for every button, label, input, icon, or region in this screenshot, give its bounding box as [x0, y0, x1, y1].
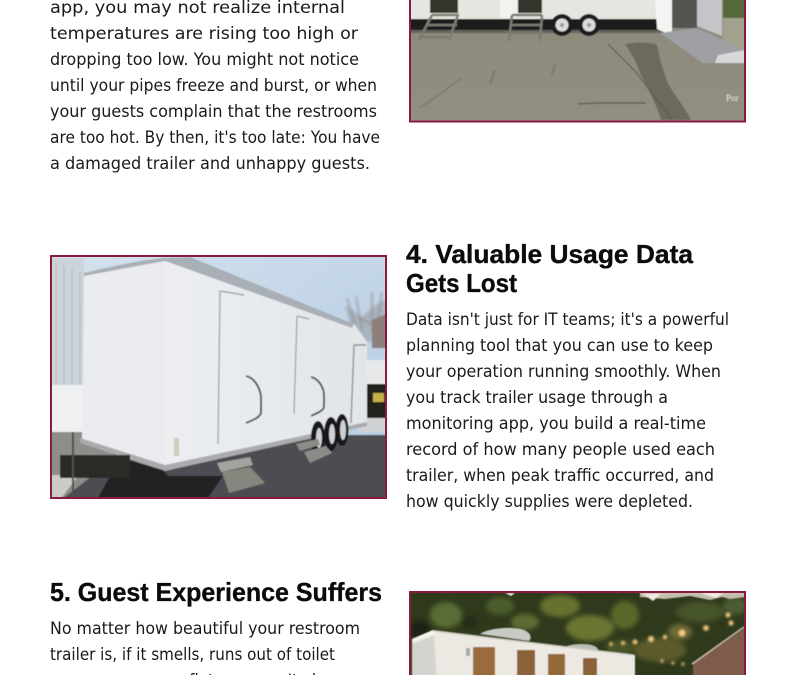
text block: section 4 paragraph: planning tool that you can use to keep — [406, 336, 713, 355]
text block: section 3 closing paragraph: dropping too low. You might not notice — [50, 50, 359, 69]
text block: section 4 paragraph: how quickly supplies were depleted. — [406, 492, 693, 511]
text block: section 5 paragraph: trailer is, if it smells, runs out of toilet — [50, 645, 335, 664]
photo: white luxury trailer with string lights at dusk — [410, 592, 747, 675]
text block: section 4 paragraph — [406, 310, 729, 511]
text block: section 3 closing paragraph: a damaged trailer and unhappy guests. — [50, 154, 370, 173]
text block: section 3 closing paragraph: are too hot. By then, it's too late: You have — [50, 128, 380, 147]
text block: section 4 paragraph: monitoring app, you build a real-time — [406, 414, 706, 433]
text block: section 5 paragraph: No matter how beautiful your restroom — [50, 619, 360, 638]
text block: section 4 paragraph: your operation running smoothly. When — [406, 362, 721, 381]
text block: section 4 paragraph: record of how many people used each — [406, 440, 715, 459]
text block: section 3 closing paragraph: temperatures are rising too high or — [50, 24, 358, 43]
text block: section 3 closing paragraph: your guests complain that the restrooms — [50, 102, 377, 121]
photo: white trailer parked on concrete — [410, 0, 745, 122]
text block: section 3 closing paragraph — [50, 0, 380, 173]
heading: section 4: 4. Valuable Usage Data — [406, 239, 694, 269]
heading: section 4 — [406, 239, 694, 298]
text block: section 5 paragraph — [50, 619, 360, 675]
heading: section 5: 5. Guest Experience Suffers — [50, 577, 382, 607]
text block: section 3 closing paragraph: until your pipes freeze and burst, or when — [50, 76, 377, 95]
text block: section 4 paragraph: trailer, when peak traffic occurred, and — [406, 466, 714, 485]
photo: white triple-axle trailer with steps — [51, 256, 386, 501]
text block: section 4 paragraph: you track trailer usage through a — [406, 388, 668, 407]
text block: section 4 paragraph: Data isn't just for IT teams; it's a powerful — [406, 310, 729, 329]
photo: white trailer parked on concrete: Por — [726, 93, 739, 103]
heading: section 4: Gets Lost — [406, 268, 517, 298]
